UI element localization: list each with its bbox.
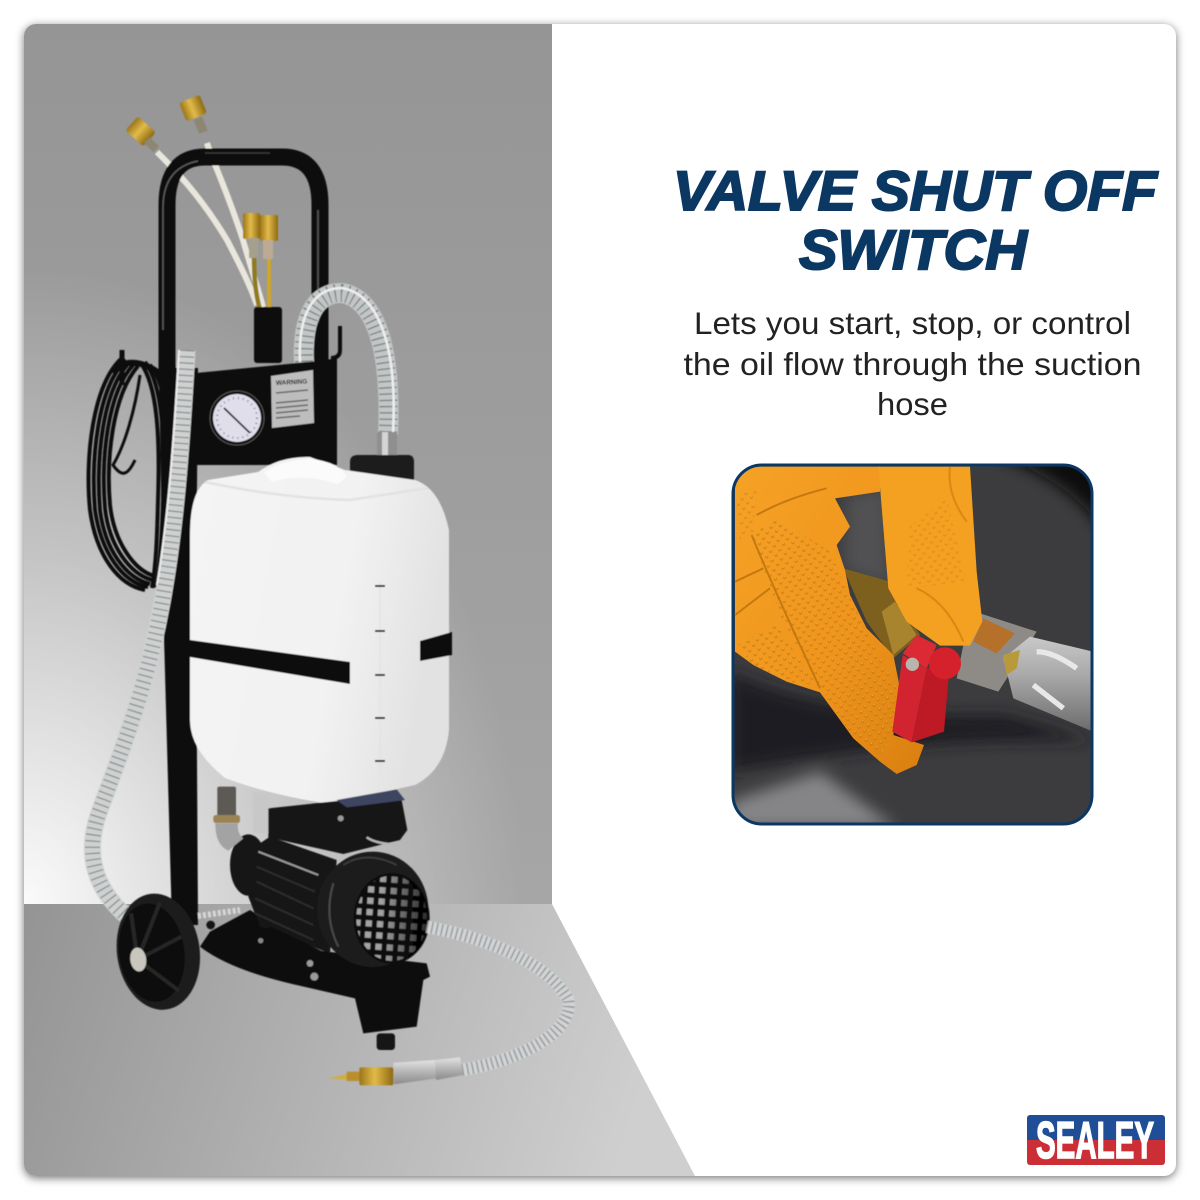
tube holder: [254, 307, 282, 363]
motor end cap: [317, 852, 428, 967]
silver connector: [1003, 637, 1093, 732]
red valve handle: [892, 635, 961, 742]
warning label: WARNING: [276, 378, 307, 387]
title line 1: VALVE SHUT OFF: [673, 159, 1159, 222]
title line 2: SWITCH: [799, 218, 1029, 281]
flexible hose to nozzle: [427, 927, 569, 1070]
graduation scale: [375, 582, 385, 772]
brass valve body: [843, 568, 920, 658]
front suction hose: [92, 350, 187, 915]
description: [684, 305, 1142, 422]
steel band: [957, 613, 1037, 692]
description line 3: hose: [877, 386, 948, 422]
hook: [331, 326, 340, 358]
back plate: [195, 358, 337, 465]
retaining strap: [174, 629, 452, 684]
white plastic jerrycan: [190, 457, 449, 804]
elbow with strainer: [213, 787, 270, 851]
hose behind pump: [198, 910, 240, 916]
title: [673, 159, 1159, 281]
dark background shapes: [730, 455, 1107, 828]
drain foot: [377, 1033, 395, 1050]
pump, base and wheel: [109, 787, 569, 1085]
wheel: [109, 888, 207, 1015]
coiled power cable: [89, 350, 169, 590]
scene background: wall and floor: [24, 24, 695, 1176]
motor body: [248, 837, 337, 953]
base plate: [200, 910, 430, 1033]
warning label: [271, 370, 314, 428]
fan guard: [355, 874, 428, 962]
frame post: [159, 368, 198, 925]
white nylon tubes with brass fittings: [125, 95, 278, 310]
photo border: [733, 465, 1092, 824]
description line 2: the oil flow through the suction: [684, 346, 1142, 382]
photo: gloved hand on red valve handle: [730, 455, 1107, 828]
pump head: [230, 834, 267, 896]
nozzle coupling: [328, 1057, 463, 1085]
Sealey logo: [1027, 1115, 1165, 1165]
rear hose fitting and filler cap: [350, 432, 414, 480]
handle frame: [163, 153, 320, 375]
pressure gauge: [210, 391, 264, 445]
product: oil suction trolley: [89, 95, 569, 1085]
terminal box: [268, 800, 407, 854]
rear suction hose: [300, 288, 394, 434]
motor foot: [252, 927, 327, 970]
description line 1: Lets you start, stop, or control: [694, 305, 1131, 341]
glove hand: [735, 467, 982, 774]
